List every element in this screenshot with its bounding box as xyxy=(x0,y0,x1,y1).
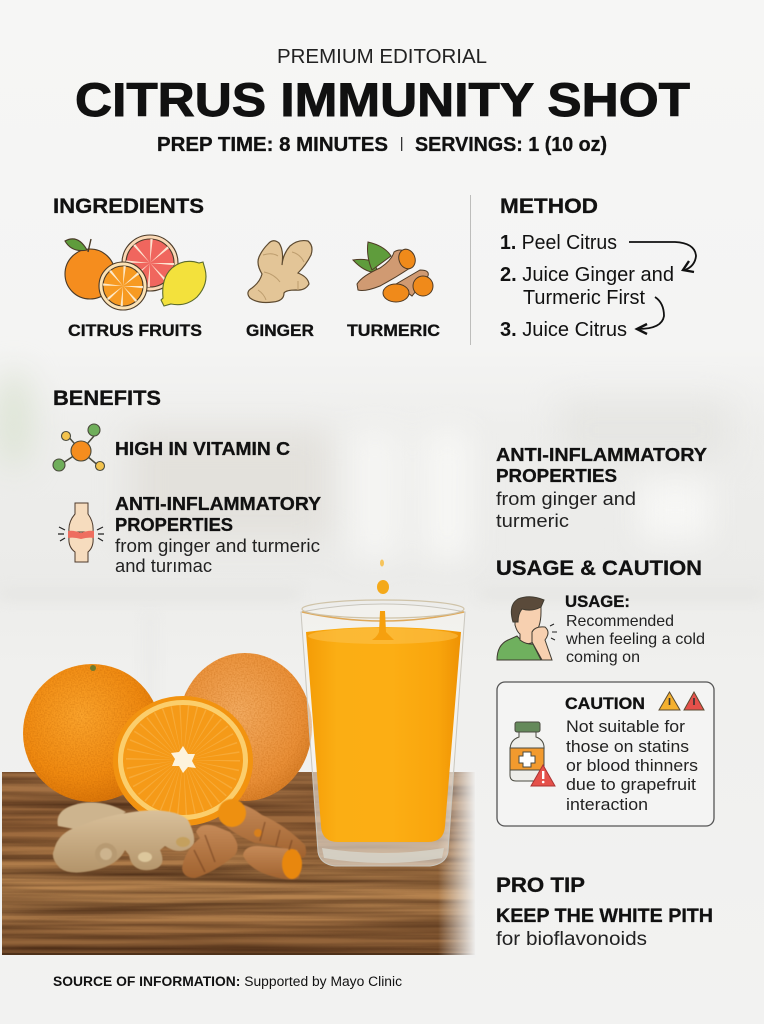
divider between ingredients and method xyxy=(470,195,471,345)
icon: medicine bottle xyxy=(510,722,555,786)
label: ginger: GINGER xyxy=(246,321,314,340)
subtitle: prep time and servings: SERVINGS: 1 (10 oz) xyxy=(415,134,607,156)
heading: pro tip: PRO TIP xyxy=(496,874,585,897)
photo: orange half xyxy=(113,696,253,826)
benefit: anti-inflammatory, left xyxy=(115,494,321,576)
photo: whole orange xyxy=(23,664,161,802)
caution text: Not suitable for xyxy=(566,717,685,736)
benefit: anti-inflammatory, left: from ginger and turmeric xyxy=(115,536,320,556)
arrow: step 1 to step 2 xyxy=(629,242,696,272)
photo: turmeric roots xyxy=(182,799,306,879)
eyebrow: PREMIUM EDITORIAL xyxy=(277,46,487,68)
heading: usage and caution: USAGE & CAUTION xyxy=(496,557,702,580)
method steps: 3. Juice Citrus xyxy=(500,319,627,341)
caution text xyxy=(566,717,698,814)
benefit: anti-inflammatory, left: PROPERTIES xyxy=(115,515,233,535)
title: CITRUS IMMUNITY SHOT xyxy=(75,73,690,126)
label: turmeric: TURMERIC xyxy=(347,321,440,340)
heading: benefits: BENEFITS xyxy=(53,387,161,410)
subtitle: prep time and servings: PREP TIME: 8 MINUTES xyxy=(157,134,388,156)
benefit: anti-inflammatory, right: PROPERTIES xyxy=(496,466,617,486)
icon: citrus fruits xyxy=(65,235,206,310)
usage text: coming on xyxy=(566,649,640,666)
usage text: USAGE: xyxy=(565,592,630,611)
photo: juice glass xyxy=(301,560,465,866)
pro tip text: for bioflavonoids xyxy=(496,929,647,950)
heading: method: METHOD xyxy=(500,195,598,218)
icon: warning triangles xyxy=(659,692,704,710)
method steps: Turmeric First xyxy=(523,287,645,309)
photo: grapefruit xyxy=(178,653,312,801)
usage text: Recommended xyxy=(566,613,674,630)
caution text: those on statins xyxy=(566,737,689,756)
caution text: interaction xyxy=(566,795,648,814)
subtitle: prep time and servings xyxy=(157,134,607,156)
benefit: anti-inflammatory, left: and turımac xyxy=(115,556,212,576)
icon: molecule xyxy=(53,424,104,471)
caution text: or blood thinners xyxy=(566,756,698,775)
photo: wooden board xyxy=(2,770,476,958)
usage text xyxy=(565,592,705,666)
benefit: anti-inflammatory, right: turmeric xyxy=(496,511,569,531)
icon: person coughing xyxy=(497,597,557,660)
pro tip text xyxy=(496,906,713,950)
method steps: 1. Peel Citrus xyxy=(500,232,617,254)
benefit: anti-inflammatory, right: ANTI-INFLAMMATORY xyxy=(496,445,707,465)
photo: ginger root xyxy=(53,802,194,873)
source line: SOURCE OF INFORMATION: Supported by Mayo Clinic xyxy=(53,974,402,989)
icon: turmeric xyxy=(353,242,433,302)
pro tip text: KEEP THE WHITE PITH xyxy=(496,906,713,927)
heading: ingredients: INGREDIENTS xyxy=(53,195,204,218)
panel: caution xyxy=(497,682,714,826)
method steps xyxy=(500,232,674,341)
icon: ginger xyxy=(248,241,312,302)
method steps: 2. Juice Ginger and xyxy=(500,264,674,286)
caution text: due to grapefruit xyxy=(566,775,696,794)
benefit: anti-inflammatory, right xyxy=(496,445,707,531)
usage text: when feeling a cold xyxy=(565,631,705,648)
label: citrus fruits: CITRUS FRUITS xyxy=(68,321,202,340)
benefit: vitamin C: HIGH IN VITAMIN C xyxy=(115,439,290,459)
arrow: step 2 to step 3 xyxy=(637,297,664,334)
icon: joint xyxy=(58,503,104,562)
benefit: anti-inflammatory, left: ANTI-INFLAMMATORY xyxy=(115,494,321,514)
caution heading: CAUTION xyxy=(565,694,645,713)
benefit: anti-inflammatory, right: from ginger and xyxy=(496,489,636,509)
